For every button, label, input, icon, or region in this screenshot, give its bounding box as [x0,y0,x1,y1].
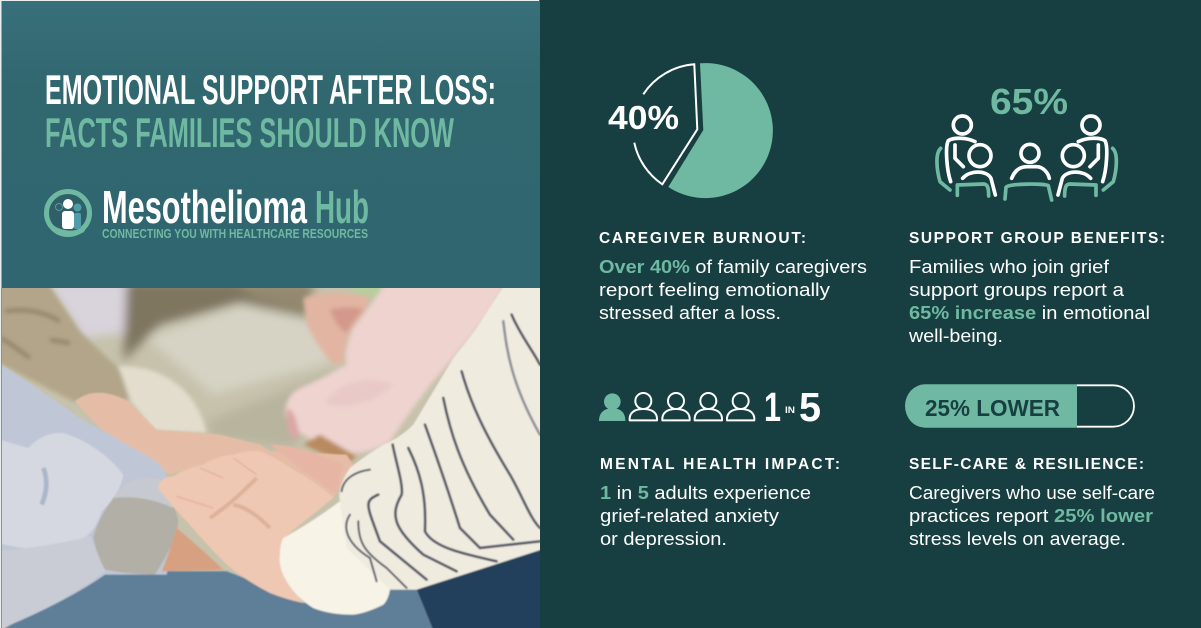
text block: mental health impact: grief-related anxiety [600,506,779,526]
text block: support group benefits [908,257,1150,346]
right background panel [540,0,1201,628]
stat: 1 in 5: 5 [799,384,821,430]
text block: self-care and resilience [909,483,1155,549]
stat: 1 in 5: IN [785,405,795,415]
text block: self-care and resilience: practices report 25% lower [909,506,1153,526]
heading: mental health impact: MENTAL HEALTH IMPACT: [600,456,840,473]
panel: mental health impact [599,384,840,549]
logo: Mesothelioma Hub: CONNECTING YOU WITH HEALTHCARE RESOURCES [102,227,368,241]
panel: support group benefits [908,81,1165,346]
icon: logo ring with people [46,192,90,235]
heading: caregiver burnout: CAREGIVER BURNOUT: [599,230,806,247]
progress bar: 25 percent lower: 25% LOWER [925,395,1060,421]
stat: 1 in 5 [764,384,821,430]
text block: support group benefits: Families who join grief [909,257,1110,277]
panel: self-care and resilience [905,384,1155,549]
heading: support group benefits: SUPPORT GROUP BENEFITS: [909,230,1165,247]
text block: self-care and resilience: Caregivers who use self-care [909,483,1155,503]
logo: Mesothelioma Hub [46,181,369,241]
text block: caregiver burnout: stressed after a loss. [599,303,781,323]
title: FACTS FAMILIES SHOULD KNOW [45,109,454,156]
text block: caregiver burnout [599,257,867,323]
pie chart: 40 percent: 40% [608,99,679,136]
logo: Mesothelioma Hub: Hub [315,181,369,233]
progress bar: 25 percent lower [905,384,1134,428]
icon: support group circle [937,116,1116,200]
heading: self-care and resilience: SELF-CARE & RESILIENCE: [909,456,1144,473]
photo: hands comforting [0,281,547,628]
panel: caregiver burnout [599,63,867,323]
title: EMOTIONAL SUPPORT AFTER LOSS: [45,66,496,113]
text block: caregiver burnout: report feeling emotionally [599,280,830,300]
left title panel [0,0,540,288]
text block: support group benefits: 65% increase in emotional [909,303,1150,323]
text block: mental health impact: or depression. [600,529,727,549]
text block: support group benefits: well-being. [908,326,1003,346]
pie chart: 40 percent [608,63,773,198]
logo: Mesothelioma Hub: Mesothelioma [102,181,307,233]
text block: self-care and resilience: stress levels on average. [909,529,1126,549]
stat: 1 in 5: 1 [764,384,781,430]
text block: support group benefits: support groups report a [909,280,1125,300]
title [45,66,496,156]
text block: mental health impact: 1 in 5 adults experience [600,483,811,503]
text block: mental health impact [600,483,811,549]
icon row: 1 in 5 people [599,393,754,421]
text block: caregiver burnout: Over 40% of family caregivers [599,257,867,277]
stat: 65 percent: 65% [990,81,1068,122]
